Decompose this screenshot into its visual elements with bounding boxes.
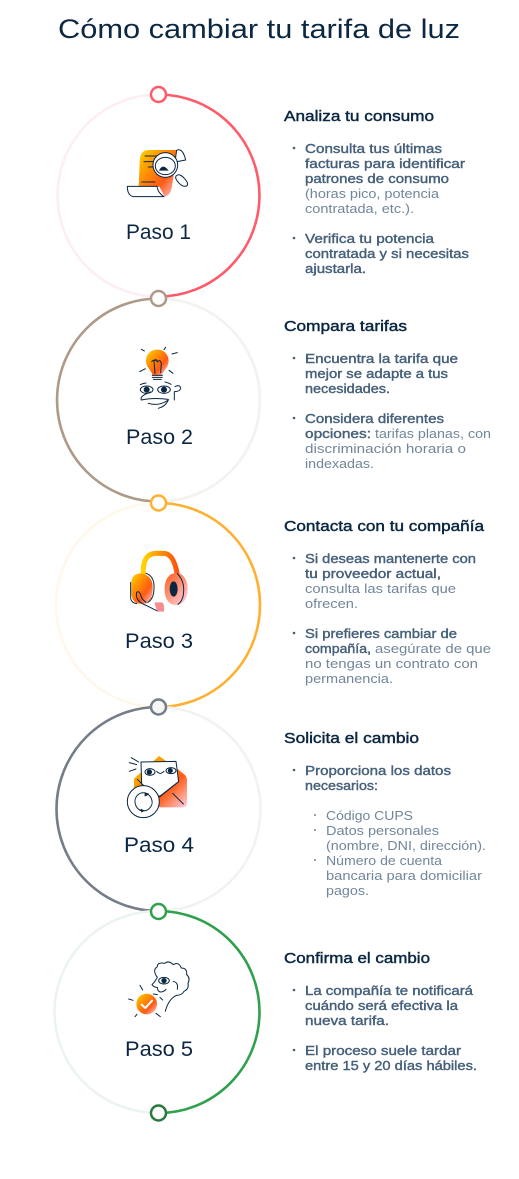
- bullet text: proporciona datos: Proporciona los datos: [305, 763, 452, 778]
- icon: headset: [131, 553, 188, 612]
- step 3 circle: [56, 503, 260, 707]
- panel: step 4 text: [284, 730, 486, 898]
- node: step 3 top: [151, 496, 166, 510]
- heading: Compara tarifas: Compara tarifas: [284, 318, 407, 335]
- bullet text: encuentra tarifa: [293, 351, 458, 396]
- bullet text: consulta facturas: (horas pico, potencia: [305, 186, 440, 201]
- sub-list: required data: Datos personales: [326, 823, 440, 838]
- bullet text: considera opciones: opciones:: [305, 426, 371, 441]
- label: Paso 4: Paso 4: [124, 834, 194, 857]
- bullet text: mantener proveedor: [293, 551, 476, 611]
- bullet text: cambiar compañía: asegúrate de que: [375, 641, 491, 656]
- bullet text: consulta facturas: facturas para identificar: [305, 156, 466, 171]
- bullet text: considera opciones: discriminación horaria o: [305, 441, 466, 456]
- bullet text: verifica potencia: ajustarla.: [305, 261, 366, 276]
- bullet text: consulta facturas: Consulta tus últimas: [305, 141, 443, 156]
- bullet text: proporciona datos: necesarios:: [305, 778, 378, 793]
- step 4 circle: [56, 707, 260, 911]
- sub-list: required data: pagos.: [326, 883, 369, 898]
- node: step 5 bottom: [151, 1106, 166, 1120]
- heading: Solicita el cambio: Solicita el cambio: [284, 730, 419, 747]
- node: step 1 top: [151, 87, 166, 102]
- bullet text: considera opciones: indexadas.: [305, 456, 374, 471]
- heading: Confirma el cambio: Confirma el cambio: [284, 950, 430, 967]
- sub-list: required data: Código CUPS: [326, 808, 413, 823]
- sub-list: required data: Número de cuenta: [326, 853, 443, 868]
- bullet text: mantener proveedor: ofrecen.: [305, 596, 358, 611]
- node: step 5 top: [151, 904, 166, 919]
- bullet text: considera opciones: tarifas planas, con: [375, 426, 491, 441]
- bullet text: verifica potencia: Verifica tu potencia: [305, 231, 435, 246]
- label: Paso 2: Paso 2: [126, 426, 193, 449]
- bullet text: verifica potencia: contratada y si necesitas: [305, 246, 470, 261]
- bullet text: cambiar compañía: [293, 626, 491, 686]
- bullet text: consulta facturas: patrones de consumo: [305, 171, 449, 186]
- bullet text: encuentra tarifa: necesidades.: [305, 381, 390, 396]
- step 1 circle: [58, 94, 259, 296]
- bullet text: plazo: [293, 1043, 477, 1073]
- sub-list: required data: (nombre, DNI, dirección).: [326, 838, 486, 853]
- bullet text: encuentra tarifa: Encuentra la tarifa que: [305, 351, 458, 366]
- title: Cómo cambiar tu tarifa de luz: [58, 14, 460, 44]
- node: step 2 top: [151, 291, 166, 306]
- bullet text: cambiar compañía: no tengas un contrato con: [305, 656, 478, 671]
- bullet text: notificación: La compañía te notificará: [305, 983, 474, 998]
- bullet text: mantener proveedor: Si deseas mantenerte con: [305, 551, 476, 566]
- bullet text: considera opciones: [293, 411, 491, 471]
- bullet text: encuentra tarifa: mejor se adapte a tus: [305, 366, 449, 381]
- bullet text: mantener proveedor: consulta las tarifas que: [305, 581, 456, 596]
- bullet text: plazo: El proceso suele tardar: [305, 1043, 462, 1058]
- bullet text: consulta facturas: [293, 141, 466, 216]
- icon: document and magnifier: [127, 150, 188, 197]
- step 5 circle: [55, 911, 260, 1113]
- bullet text: considera opciones: Considera diferentes: [305, 411, 445, 426]
- heading: Analiza tu consumo: Analiza tu consumo: [284, 108, 434, 125]
- bullet text: mantener proveedor: tu proveedor actual,: [305, 566, 441, 581]
- sub-list: required data: [314, 808, 486, 898]
- panel: step 5 text: [284, 950, 477, 1073]
- heading: Contacta con tu compañía: Contacta con tu compañía: [284, 518, 485, 535]
- bullet text: consulta facturas: contratada, etc.).: [305, 201, 414, 216]
- sub-list: required data: bancaria para domiciliar: [326, 868, 483, 883]
- step 2 circle: [57, 298, 260, 502]
- bullet text: cambiar compañía: permanencia.: [305, 671, 393, 686]
- label: Paso 3: Paso 3: [125, 630, 193, 653]
- panel: step 3 text: [284, 518, 491, 686]
- bullet text: plazo: entre 15 y 20 días hábiles.: [305, 1058, 477, 1073]
- icon: light bulb and face: [140, 347, 181, 408]
- node: step 4 top: [151, 700, 166, 714]
- panel: step 1 text: [284, 108, 470, 276]
- panel: step 2 text: [284, 318, 491, 471]
- icon: person and check badge: [129, 962, 189, 1017]
- label: Paso 1: Paso 1: [126, 221, 191, 244]
- bullet text: proporciona datos: [293, 763, 452, 793]
- icon: envelope with refresh badge: [127, 756, 187, 818]
- bullet text: notificación: cuándo será efectiva la: [305, 998, 459, 1013]
- bullet text: cambiar compañía: compañía,: [305, 641, 371, 656]
- bullet text: verifica potencia: [293, 231, 470, 276]
- bullet text: notificación: [293, 983, 474, 1028]
- bullet text: notificación: nueva tarifa.: [305, 1013, 389, 1028]
- bullet text: cambiar compañía: Si prefieres cambiar de: [305, 626, 457, 641]
- label: Paso 5: Paso 5: [125, 1038, 193, 1061]
